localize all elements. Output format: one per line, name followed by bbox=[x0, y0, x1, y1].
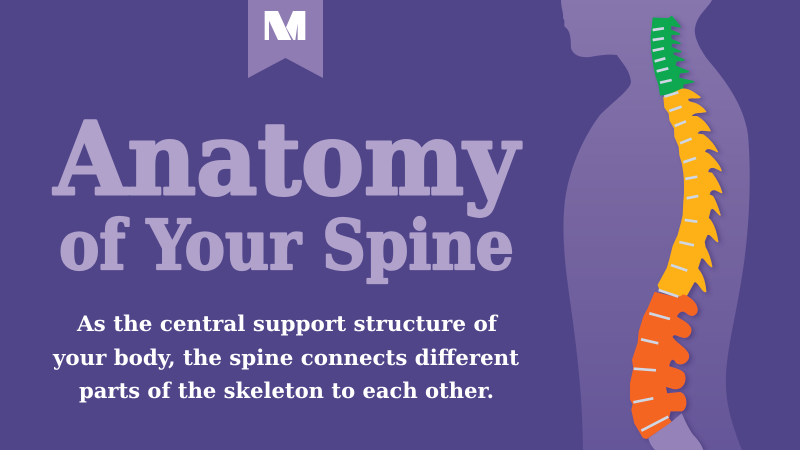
intervertebral discs bbox=[633, 28, 698, 431]
description text: As the central support structure of bbox=[76, 311, 499, 336]
lumbar vertebrae (orange) bbox=[631, 293, 697, 438]
sacrum bbox=[648, 413, 703, 450]
thoracic vertebrae (yellow) bbox=[658, 89, 722, 296]
body silhouette bbox=[561, 0, 750, 450]
ribbon logo badge bbox=[248, 0, 323, 78]
description text: your body, the spine connects different bbox=[52, 345, 519, 370]
description text bbox=[52, 311, 519, 403]
icon: NM logo bbox=[265, 11, 305, 40]
title: Anatomy bbox=[53, 100, 522, 218]
spine bbox=[631, 17, 722, 450]
title bbox=[53, 100, 522, 286]
title: of Your Spine bbox=[59, 206, 514, 286]
cervical vertebrae (green) bbox=[651, 17, 693, 95]
description text: parts of the skeleton to each other. bbox=[79, 378, 494, 403]
